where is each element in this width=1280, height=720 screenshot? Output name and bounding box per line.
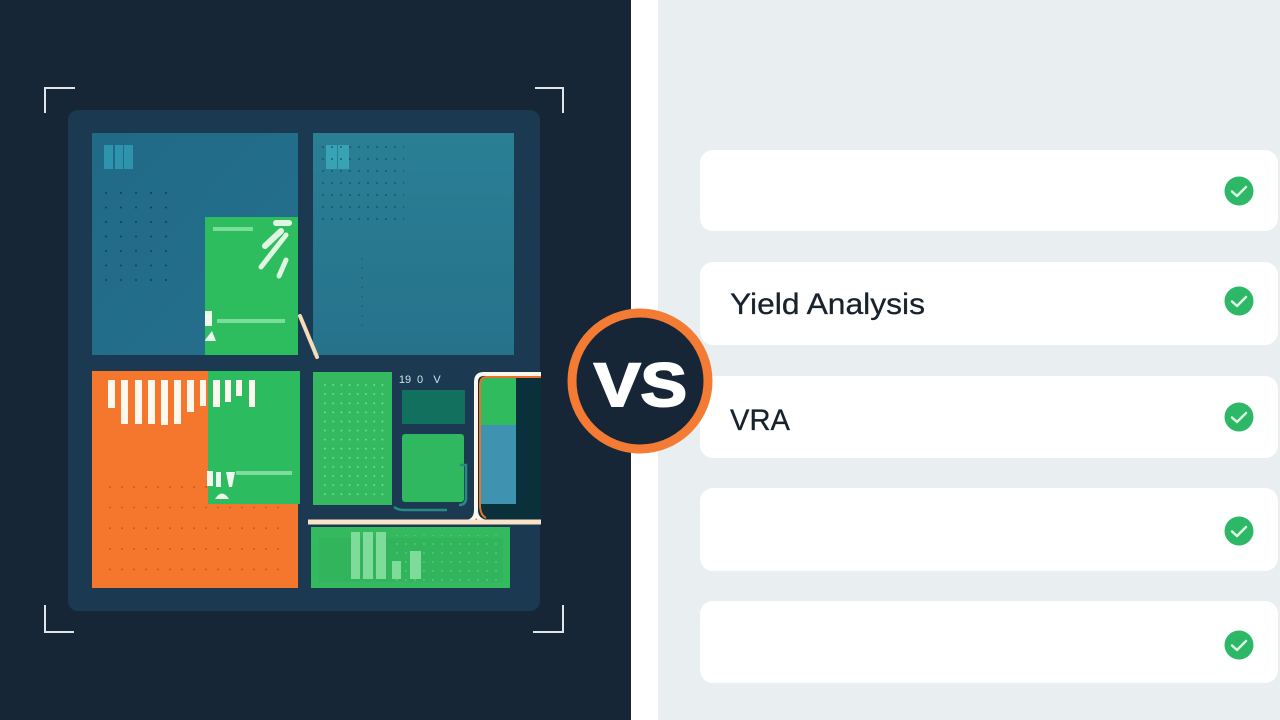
left dark background xyxy=(0,0,631,720)
teal bracket xyxy=(394,465,466,510)
panel: framed device xyxy=(466,374,541,522)
panel: green dotted card xyxy=(313,372,392,505)
card 4 xyxy=(700,488,1278,571)
panel: teal map left xyxy=(92,133,298,355)
small label top xyxy=(213,227,253,231)
dot grid green xyxy=(322,383,386,499)
card 3 xyxy=(700,376,1278,458)
horizontal divider line xyxy=(308,520,541,524)
small labels: 19 xyxy=(399,374,411,386)
icon: check xyxy=(1224,402,1254,432)
white brush marks xyxy=(261,223,289,276)
panel: green card middle xyxy=(207,371,300,504)
VS label: VS xyxy=(594,351,687,419)
small labels: V xyxy=(433,374,441,386)
small label bottom xyxy=(217,319,285,323)
panel: dashboard mockup xyxy=(68,110,541,611)
panel: teal map right xyxy=(313,133,514,355)
dot grid orange xyxy=(108,485,283,575)
icon: teal bars right xyxy=(326,145,349,169)
device frame accent xyxy=(480,377,541,518)
white divider strip xyxy=(631,0,658,720)
dot grid right xyxy=(322,146,404,224)
green square xyxy=(402,434,464,502)
small labels: 0 xyxy=(417,374,423,386)
dot grid left xyxy=(104,191,180,281)
panel: green card top xyxy=(205,217,298,355)
dotted column xyxy=(361,258,363,326)
icon: check xyxy=(1224,630,1254,660)
panel: green bottom chart xyxy=(311,527,510,588)
diagonal orange line xyxy=(300,316,317,357)
dot grid chart xyxy=(396,535,502,581)
icon: check xyxy=(1224,176,1254,206)
label: Yield Analysis: Yield Analysis xyxy=(730,288,925,321)
blue segment xyxy=(481,425,516,504)
corner brackets xyxy=(45,88,563,632)
device frame xyxy=(466,374,541,522)
white marks left edge xyxy=(205,311,216,341)
white bar chart xyxy=(108,380,255,425)
VS badge xyxy=(572,313,708,449)
panel: comparison list xyxy=(700,150,1278,683)
label: VRA: VRA xyxy=(730,404,790,437)
bright bars xyxy=(351,532,421,579)
icon: check xyxy=(1224,286,1254,316)
card 1 xyxy=(700,150,1278,231)
card 2 xyxy=(700,262,1278,345)
white letter marks xyxy=(207,471,235,499)
dark green block xyxy=(402,390,465,424)
small labels xyxy=(399,374,441,386)
right light background xyxy=(658,0,1280,720)
green segment xyxy=(481,378,516,425)
panel: orange block xyxy=(92,371,298,588)
small label xyxy=(236,471,292,475)
icon: teal bars left xyxy=(104,145,133,169)
icon: check xyxy=(1224,516,1254,546)
card 5 xyxy=(700,601,1278,683)
